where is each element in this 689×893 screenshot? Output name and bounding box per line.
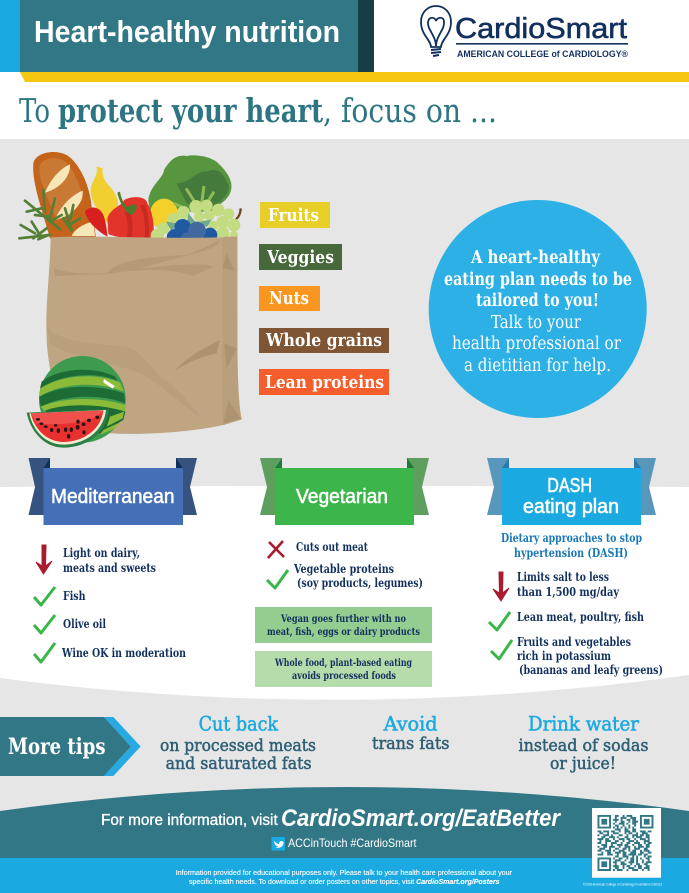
icon: cross xyxy=(268,541,284,558)
callout: talk to a health professional: Talk to your xyxy=(491,313,582,333)
tip: Cut back: on processed meats xyxy=(160,736,316,756)
label: Fruits: Fruits xyxy=(268,205,319,226)
callout: vegan: meat, fish, eggs or dairy products xyxy=(267,626,420,638)
text: Cuts out meat: Cuts out meat xyxy=(296,540,368,554)
banner: Vegetarian xyxy=(260,458,429,525)
text: Fruits and vegetables xyxy=(517,635,663,677)
text: disclaimer: specific health needs. To download or order posters on other topics, visit CardioSmart.org/Posters xyxy=(189,877,500,886)
icon: check xyxy=(491,640,512,659)
panel: Vegetarian xyxy=(255,458,432,687)
text: Dietary approaches to stop hypertension: Dietary approaches to stop xyxy=(501,531,642,545)
icon: small red pepper xyxy=(85,208,107,237)
illustration: grocery bag of healthy food xyxy=(19,152,242,448)
QR code xyxy=(592,808,661,878)
arrow: More tips: More tips xyxy=(8,734,106,760)
tip: Drink water: or juice! xyxy=(550,754,616,774)
title: To protect your heart, focus on: protect your heart xyxy=(58,91,324,130)
tip: Avoid: Avoid xyxy=(383,712,438,736)
tip: Cut back: and saturated fats xyxy=(166,754,312,774)
text: disclaimer: Information provided for educational purposes only. Please talk to your health care professional about your xyxy=(176,868,512,877)
tip: Drink water: Drink water xyxy=(528,712,639,736)
tip: Cut back: Cut back xyxy=(199,712,279,736)
icon: green grapes xyxy=(151,186,241,242)
label: Whole grains: Whole grains xyxy=(265,330,382,351)
text: Limits salt: than 1,500 mg/day xyxy=(517,585,620,599)
label: Nuts xyxy=(259,286,320,311)
callout: vegan xyxy=(255,607,432,643)
icon: lemon xyxy=(150,199,178,229)
text: Light on dairy, meats and sweets xyxy=(63,546,156,575)
tip: Cut back xyxy=(160,712,316,774)
text: Fish: Fish xyxy=(63,589,86,603)
label: Veggies: Veggies xyxy=(266,247,334,268)
callout: talk to a health professional: health professional or xyxy=(452,334,622,354)
icon: down arrow xyxy=(493,572,509,601)
text: Dietary approaches to stop hypertension xyxy=(501,531,642,560)
panel: white diet columns background xyxy=(0,486,689,700)
icon: check xyxy=(267,570,288,588)
banner: DASH eating plan xyxy=(487,458,656,525)
text: copyright: ©2018 American College of Cardiology Foundation CS0313 xyxy=(583,883,662,887)
text: Dietary approaches to stop hypertension: hypertension (DASH) xyxy=(514,546,628,560)
text: Lean meat, poultry, fish: Lean meat, poultry, fish xyxy=(517,610,644,624)
callout: talk to a health professional xyxy=(429,200,647,418)
banner: Mediterranean: Mediterranean xyxy=(51,486,174,508)
icon: rosemary sprigs xyxy=(19,190,80,239)
icon: light bulb with heart xyxy=(421,6,451,56)
text: disclaimer xyxy=(176,868,512,886)
icon: banana xyxy=(91,167,118,223)
heading: Heart-healthy nutrition: Heart-healthy nutrition xyxy=(34,14,340,49)
food groups list xyxy=(259,202,389,395)
logo: CardioSmart xyxy=(421,6,628,60)
icon: check xyxy=(34,643,55,662)
icon: check xyxy=(34,615,55,633)
callout: talk to a health professional: a dietitian for help. xyxy=(464,356,611,376)
tip: Avoid xyxy=(372,712,450,754)
tip: Drink water: instead of sodas xyxy=(518,736,648,756)
logo subtitle: AMERICAN COLLEGE of CARDIOLOGY® xyxy=(457,49,628,60)
label: Lean proteins: Lean proteins xyxy=(265,372,384,393)
icon: bread xyxy=(33,152,96,238)
footer band xyxy=(0,787,689,893)
icon: red bell pepper xyxy=(107,192,154,241)
label: Fruits xyxy=(260,202,330,228)
icon: watermelon xyxy=(27,356,126,448)
icon: paper bag xyxy=(46,237,242,434)
text: more information: For more information, visit xyxy=(101,812,278,829)
text: Vegetable proteins: Vegetable proteins xyxy=(293,562,394,576)
text: Vegetable proteins xyxy=(293,562,423,590)
icon: twitter xyxy=(272,837,285,850)
callout: whole food xyxy=(255,651,432,687)
callout: whole food: Whole food, plant-based eating xyxy=(274,657,412,669)
banner: DASH eating plan: DASH xyxy=(547,475,592,497)
text: Limits salt: Limits salt to less xyxy=(517,570,609,584)
icon: check xyxy=(489,612,510,630)
text: social handles: ACCinTouch #CardioSmart xyxy=(288,836,417,850)
icon: blueberries xyxy=(167,219,217,246)
callout: talk to a health professional: eating plan needs to be xyxy=(444,270,632,290)
banner: Mediterranean xyxy=(28,458,197,525)
header band xyxy=(0,0,689,82)
banner: Vegetarian: Vegetarian xyxy=(296,486,388,508)
callout: talk to a health professional: A heart-healthy xyxy=(470,248,601,268)
tip: Drink water xyxy=(518,712,648,774)
text: Light on dairy, meats and sweets: Light on dairy, xyxy=(63,546,140,560)
panel: DASH xyxy=(487,458,663,677)
icon: down arrow xyxy=(36,545,52,574)
text: Light on dairy, meats and sweets: meats and sweets xyxy=(63,561,156,575)
icon: check xyxy=(34,587,55,605)
icon: watermelon slice xyxy=(27,409,109,448)
text: Fruits and vegetables: rich in potassium xyxy=(517,649,611,663)
text: Olive oil: Olive oil xyxy=(63,617,106,631)
banner: DASH eating plan: eating plan xyxy=(523,496,619,518)
text: website URL: CardioSmart.org/EatBetter xyxy=(281,805,562,832)
text: Limits salt xyxy=(517,570,620,599)
callout: whole food: avoids processed foods xyxy=(292,670,396,682)
logo wordmark: CardioSmart xyxy=(455,13,627,45)
icon: broccoli xyxy=(148,155,231,212)
text: Fruits and vegetables: Fruits and vegetables xyxy=(517,635,631,649)
label: Nuts: Nuts xyxy=(269,288,309,309)
panel: Mediterranean xyxy=(28,458,197,662)
arrow: More tips xyxy=(0,717,141,776)
tip: Avoid: trans fats xyxy=(372,734,450,754)
text: Wine OK in moderation: Wine OK in moderation xyxy=(61,646,186,660)
callout: vegan: Vegan goes further with no xyxy=(280,613,406,625)
callout: talk to a health professional: tailored to you! xyxy=(476,291,599,311)
title: To protect your heart, focus on: To xyxy=(19,91,50,130)
title: To protect your heart, focus on: , focus on ... xyxy=(323,91,497,130)
text: Vegetable proteins: (soy products, legumes) xyxy=(297,576,423,590)
